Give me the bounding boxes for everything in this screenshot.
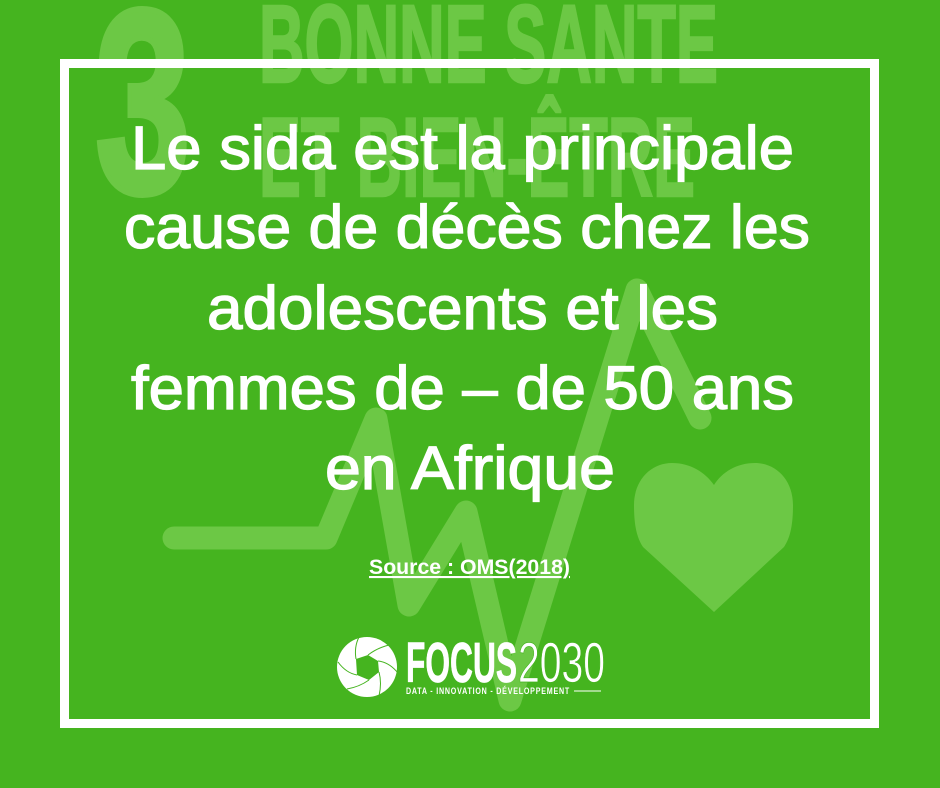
headline line 1: Le sida est la principale [131, 114, 794, 182]
headline [124, 114, 810, 502]
headline line 4: femmes de – de 50 ans [131, 354, 794, 422]
watermark: heart [634, 463, 793, 612]
watermark: goal title [259, 0, 718, 220]
logo tagline: DATA - INNOVATION - DÉVELOPPEMENT [406, 686, 570, 696]
watermark: heartbeat line [174, 290, 700, 700]
logo tagline rule [574, 690, 601, 692]
logo wordmark 2030: 2030 [518, 631, 605, 695]
headline line 2: cause de décès chez les [124, 193, 810, 261]
headline line 5: en Afrique [325, 434, 615, 502]
icon: camera aperture [337, 637, 398, 697]
logo: Focus 2030 [337, 631, 605, 697]
headline line 3: adolescents et les [207, 274, 718, 342]
source line: Source : OMS(2018) [369, 556, 570, 579]
logo wordmark FOCUS: FOCUS [406, 631, 517, 695]
white frame [64, 64, 874, 724]
